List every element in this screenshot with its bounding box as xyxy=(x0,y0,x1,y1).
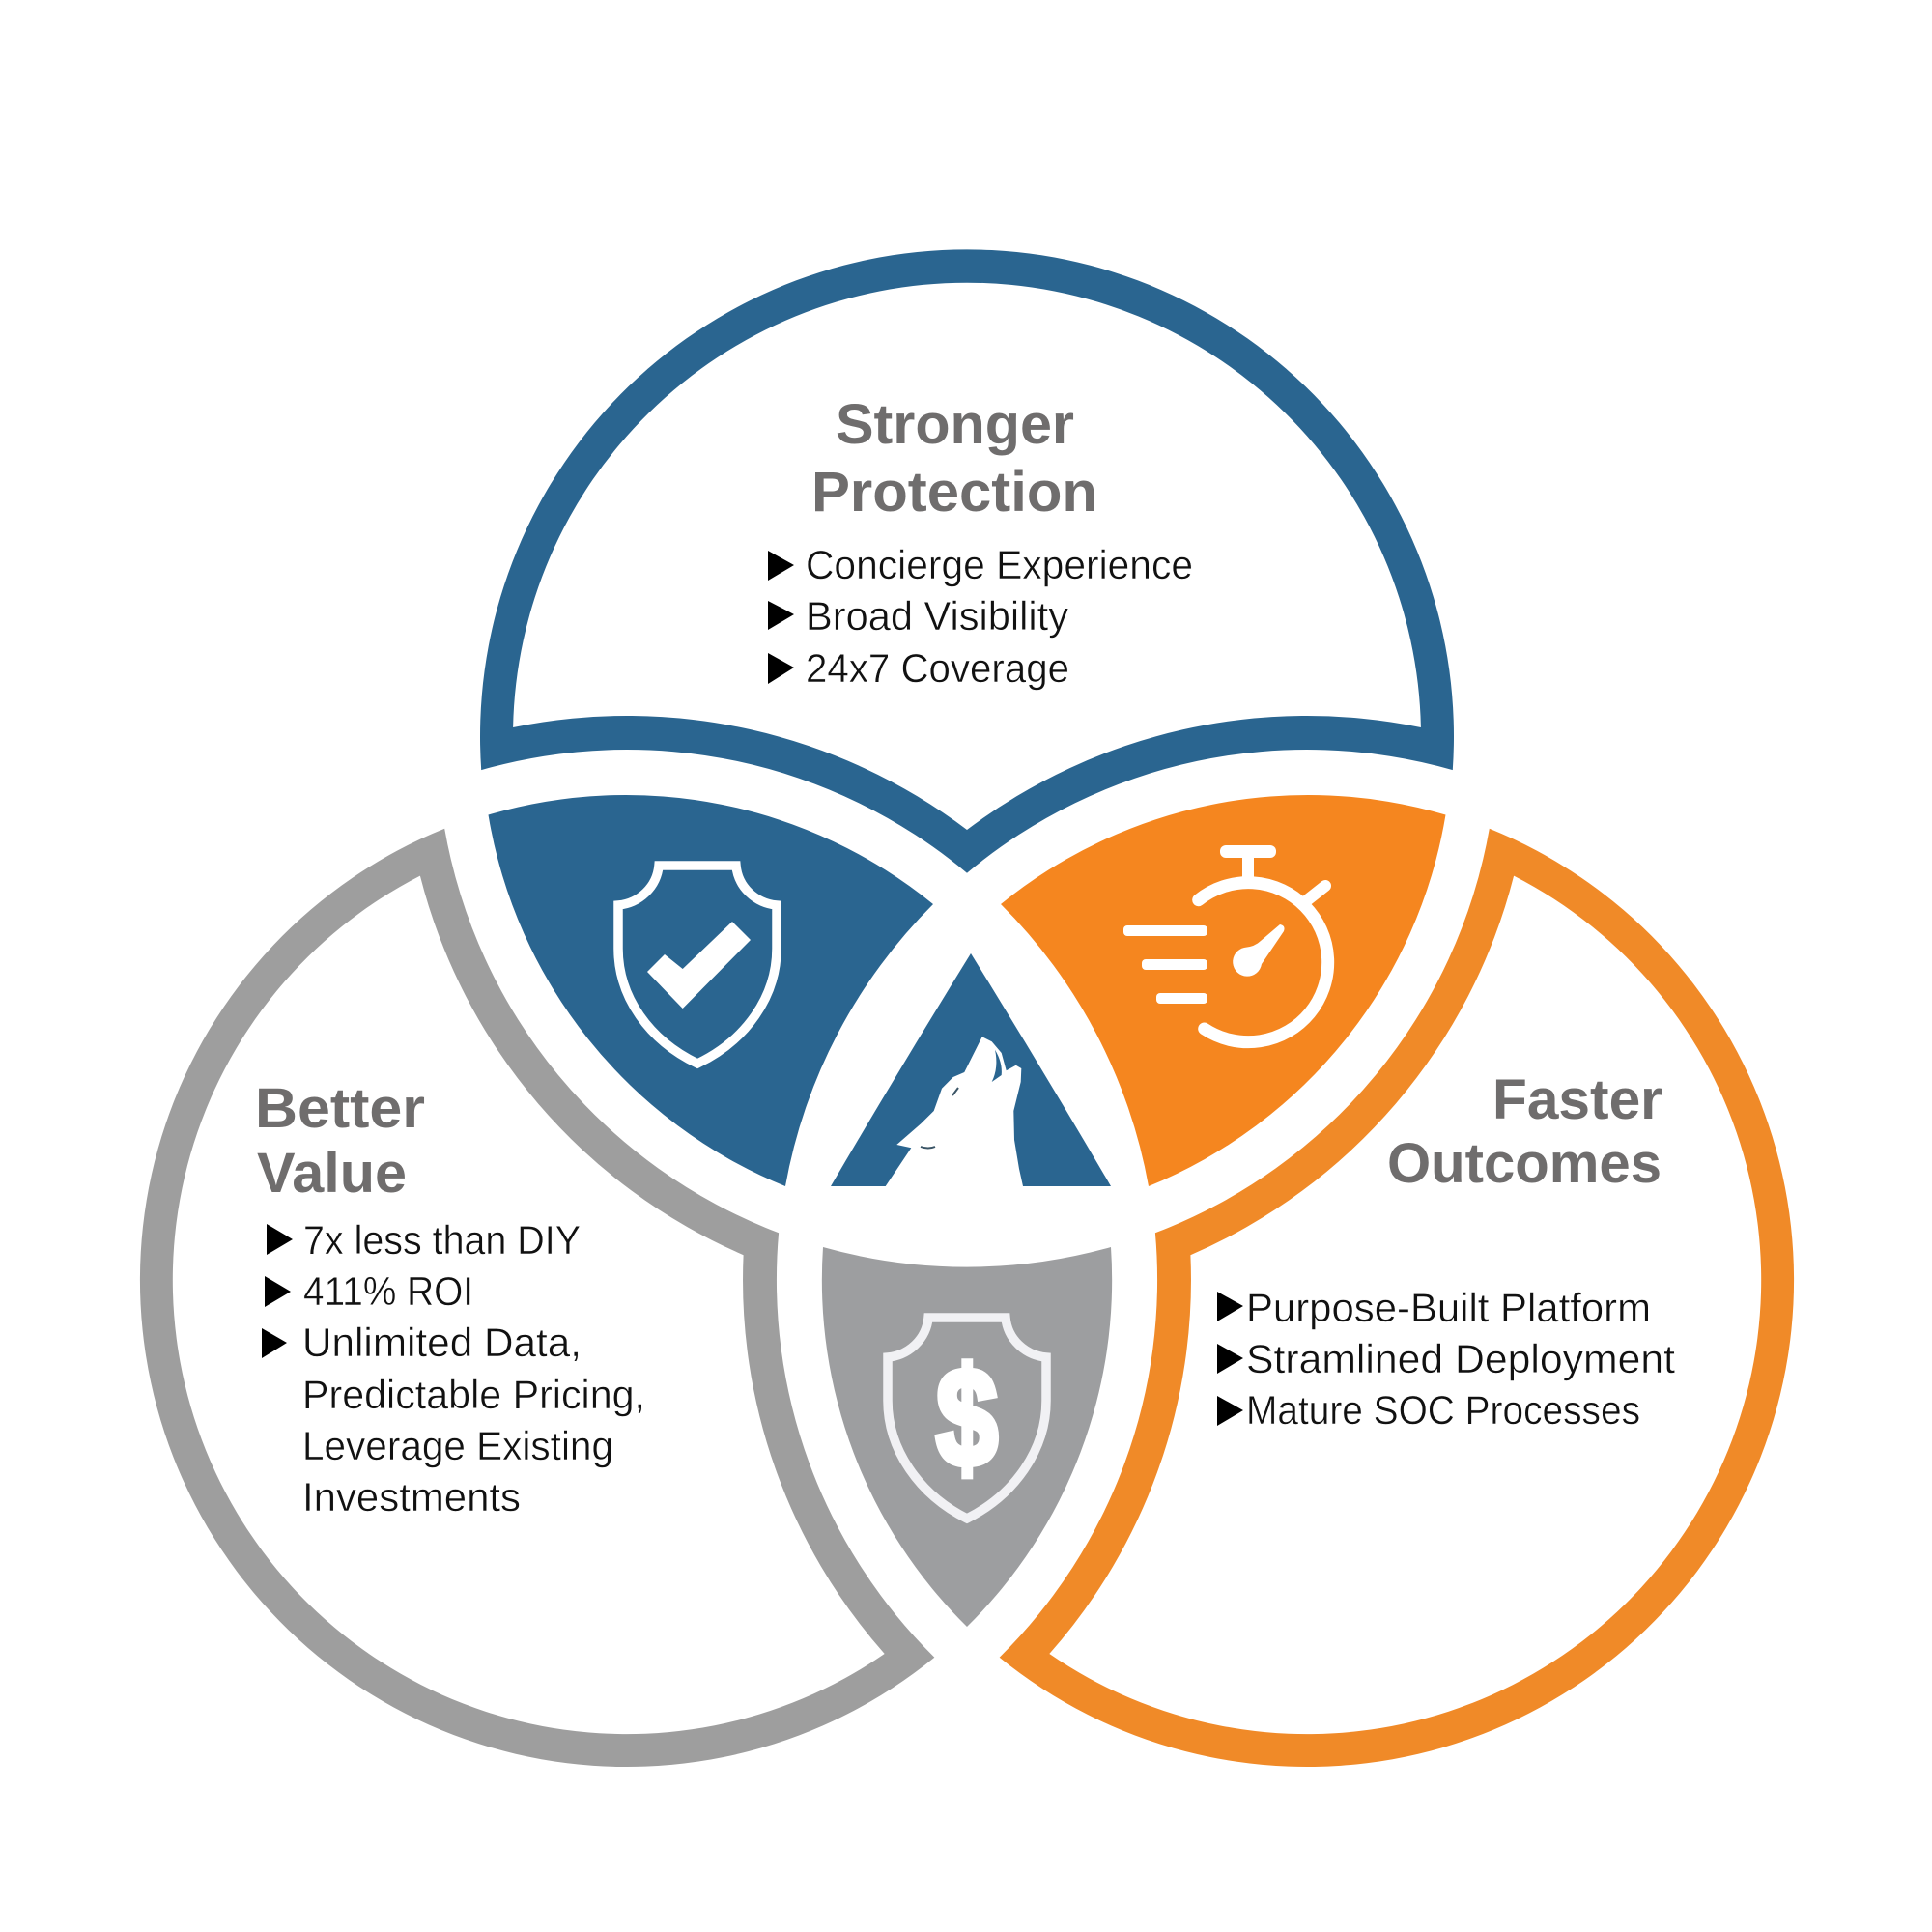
bullet list: better value: Predictable Pricing, xyxy=(302,1372,645,1417)
panel: better value circle xyxy=(140,829,934,1767)
heading: better value: Better xyxy=(255,1077,425,1140)
panel: stronger protection circle xyxy=(480,249,1454,873)
bullet list: better value: 411% ROI xyxy=(303,1268,473,1314)
bullet list: faster outcomes: Mature SOC Processes xyxy=(1246,1387,1640,1433)
heading: better value: Value xyxy=(257,1142,407,1205)
heading: stronger protection: Protection xyxy=(811,461,1097,524)
heading: better value xyxy=(255,1077,425,1205)
icon: stopwatch xyxy=(1123,845,1328,1042)
heading: stronger protection xyxy=(811,393,1097,524)
icon: shield with check mark xyxy=(618,866,777,1064)
icon: dollar shield: $ xyxy=(936,1339,998,1495)
heading: faster outcomes: Faster xyxy=(1492,1068,1662,1131)
heading: stronger protection: Stronger xyxy=(836,393,1074,456)
bullet list: better value: Investments xyxy=(302,1474,521,1520)
bullet list: stronger protection xyxy=(768,542,1193,691)
icon: howling wolf xyxy=(886,1037,1023,1186)
blue ring: top circle xyxy=(480,249,1454,873)
bullet list: stronger protection: 24x7 Coverage xyxy=(806,645,1069,691)
heading: faster outcomes xyxy=(1387,1068,1662,1195)
grey ring: left circle xyxy=(140,829,934,1767)
heading: faster outcomes: Outcomes xyxy=(1387,1132,1662,1195)
bullet list: stronger protection: Concierge Experience xyxy=(806,542,1193,587)
panel: faster outcomes circle xyxy=(1000,829,1794,1767)
bullet list: better value: Leverage Existing xyxy=(302,1423,613,1468)
center triangle with wolf xyxy=(831,953,1111,1186)
bullet list: faster outcomes: Stramlined Deployment xyxy=(1246,1336,1675,1381)
bullet list: better value xyxy=(262,1217,645,1520)
bullet list: faster outcomes: Purpose-Built Platform xyxy=(1246,1285,1651,1330)
orange lens with stopwatch xyxy=(1001,795,1445,1186)
orange ring: right circle xyxy=(1000,829,1794,1767)
bullet list: better value: Unlimited Data, xyxy=(302,1320,582,1365)
bullet list: better value: 7x less than DIY xyxy=(303,1217,581,1263)
grey shield lens with dollar xyxy=(822,1247,1112,1627)
blue lens with shield xyxy=(489,795,933,1186)
icon: dollar shield xyxy=(888,1318,1046,1519)
bullet list: faster outcomes xyxy=(1217,1285,1675,1433)
bullet list: stronger protection: Broad Visibility xyxy=(806,593,1068,639)
